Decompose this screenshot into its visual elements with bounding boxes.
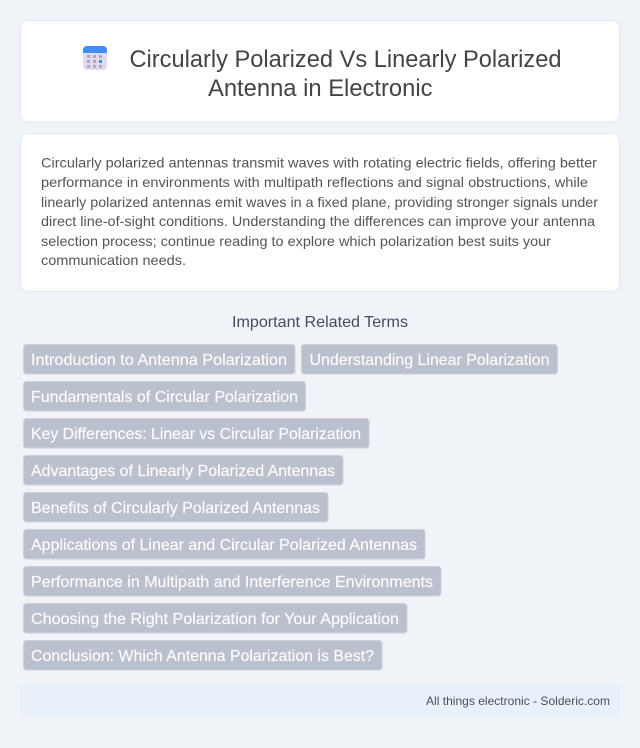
tag: introduction	[24, 344, 295, 374]
text block: introduction paragraph	[41, 154, 598, 268]
footer	[20, 684, 620, 718]
panel: header	[20, 20, 620, 122]
text block: introduction paragraph: direct line-of-sight conditions. Understanding the differences can improve your antenna	[41, 213, 595, 229]
text block: introduction paragraph: Circularly polarized antennas transmit waves with rotating electric fields, offering better	[41, 154, 597, 170]
tag: conclusion	[24, 640, 382, 670]
list: related term tags	[24, 344, 558, 670]
title	[130, 46, 562, 102]
tag: circular fundamentals	[24, 382, 306, 411]
tag: choosing polarization: Choosing the Right Polarization for Your Application	[31, 611, 399, 628]
tag: introduction: Introduction to Antenna Polarization	[31, 352, 287, 369]
tag: applications	[24, 530, 425, 559]
tag: key differences	[24, 418, 369, 448]
icon: calendar	[83, 46, 107, 70]
tag: performance	[24, 566, 441, 596]
footer: All things electronic - Solderic.com	[426, 694, 610, 708]
tag: applications: Applications of Linear and Circular Polarized Antennas	[31, 537, 417, 554]
tag: circular fundamentals: Fundamentals of Circular Polarization	[31, 389, 298, 406]
tag: choosing polarization	[24, 604, 407, 633]
heading: important related terms: Important Related Terms	[232, 314, 408, 331]
tag: linear polarization: Understanding Linear Polarization	[310, 352, 550, 369]
panel: introduction	[20, 134, 620, 292]
tag: circular benefits: Benefits of Circularly Polarized Antennas	[31, 500, 320, 517]
tag: linear advantages	[24, 456, 343, 485]
tag: performance: Performance in Multipath and Interference Environments	[31, 574, 433, 591]
tag: linear polarization	[302, 344, 558, 374]
tag: key differences: Key Differences: Linear vs Circular Polarization	[31, 426, 361, 443]
text block: introduction paragraph: linearly polarized antennas emit waves in a fixed plane, providing stronger signals under	[41, 194, 598, 210]
text block: introduction paragraph: performance in environments with multipath reflections and signal obstructions, while	[41, 174, 588, 190]
text block: introduction paragraph: selection process; continue reading to explore which polarization best suits your	[41, 233, 551, 249]
title: Circularly Polarized Vs Linearly Polarized	[130, 46, 562, 73]
text block: introduction paragraph: communication needs.	[41, 252, 186, 268]
tag: linear advantages: Advantages of Linearly Polarized Antennas	[31, 463, 335, 480]
tag: circular benefits	[24, 492, 328, 522]
tag: conclusion: Conclusion: Which Antenna Polarization is Best?	[31, 648, 374, 665]
title: Antenna in Electronic	[208, 75, 432, 102]
